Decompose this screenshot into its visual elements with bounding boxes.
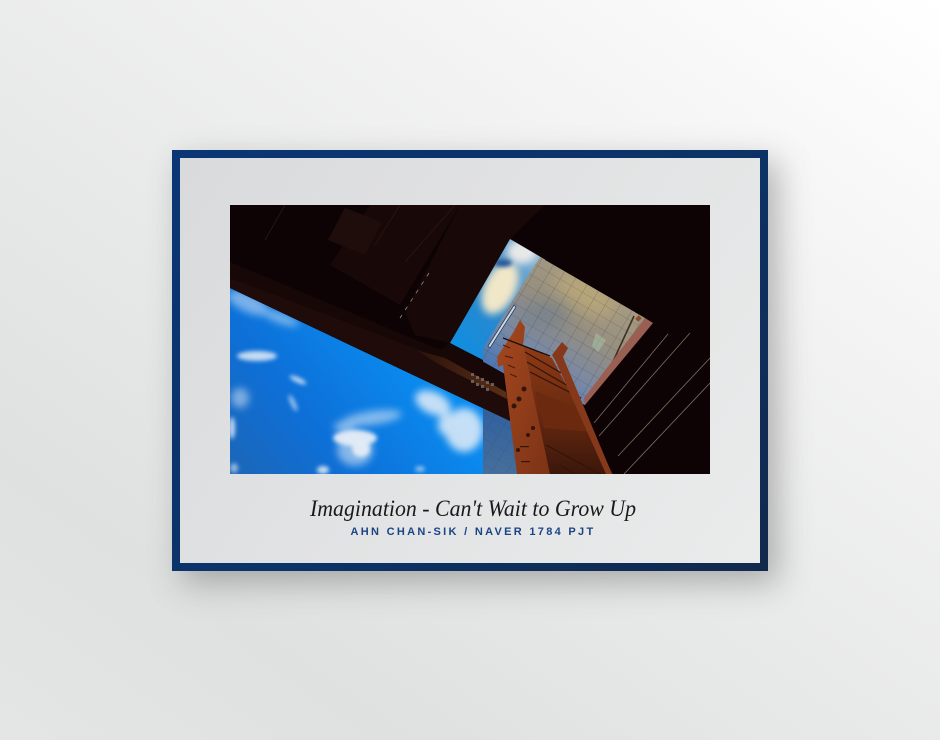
- navy picture frame: [172, 150, 768, 571]
- glass tower: [483, 257, 645, 405]
- window frame edge: [584, 318, 653, 405]
- subtitle: AHN CHAN-SIK / NAVER 1784 PJT: [350, 526, 595, 538]
- rusted steel column: [497, 320, 613, 474]
- upper window sky: [450, 239, 545, 360]
- tower sign: [488, 305, 516, 348]
- mat board: [180, 158, 760, 563]
- lower tower section: [483, 405, 525, 474]
- light slit in ceiling: [400, 273, 429, 318]
- title: Imagination - Can't Wait to Grow Up: [309, 496, 636, 521]
- diagonal cable lines: [594, 333, 710, 474]
- horizontal steel beam: [230, 262, 510, 421]
- photo: looking up at a tower through steel beams: [230, 205, 710, 474]
- dark ceiling structure: [230, 205, 710, 474]
- lower sky with clouds: [230, 288, 483, 474]
